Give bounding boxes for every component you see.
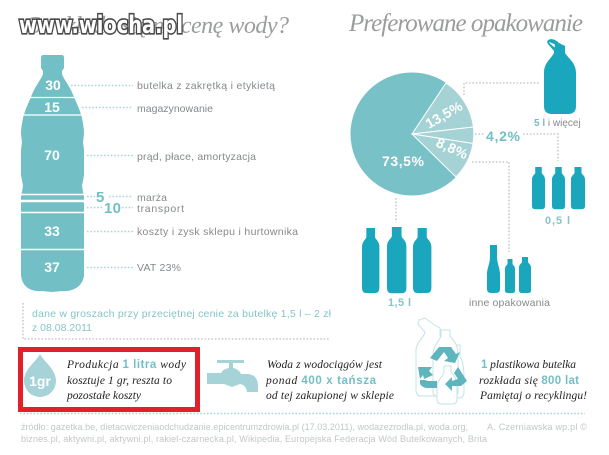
note: data in grosz: dane w groszach przy przeciętnej cenie za butelkę 1,5 l – 2 zł	[32, 308, 332, 320]
icon: 1,5 l bottles	[362, 227, 431, 309]
heading: price of water: Co składa się na cenę wody?	[24, 13, 289, 39]
bottle segment values: 33	[44, 223, 60, 239]
divider	[20, 412, 585, 414]
bottle segment values: 70	[44, 147, 60, 163]
cost labels with leader lines: 5	[96, 189, 104, 206]
cost labels with leader lines: 10	[104, 200, 121, 217]
bottle segment values: 30	[45, 77, 61, 93]
icon: water drop	[24, 354, 56, 397]
connectors from the pie to bottles	[396, 83, 558, 252]
callout: 1 litre production (red frame)	[20, 350, 198, 410]
heading: preferred packaging: Preferowane opakowanie	[348, 10, 583, 37]
recycling fact	[479, 359, 587, 402]
watermark: www.wiocha.pl	[19, 11, 183, 39]
tap water fact: ponad 400 x tańsza	[265, 375, 377, 387]
sources and credit	[21, 422, 587, 444]
note: data in grosz	[23, 303, 332, 339]
icon: water tap	[207, 360, 258, 392]
bottle segment values: 15	[44, 99, 60, 115]
connectors from the pie to bottles: 4,2%	[486, 128, 521, 144]
sources and credit: źródło: gazetka.be, dietacwiczeniaodchudzanie.epicentrumzdrowia.pl (17.03.2011), wodazezrodla.pl, woda.org,	[21, 422, 468, 432]
label: other packaging: inne opakowania	[469, 297, 550, 309]
label: 0,5 l: 0,5 l	[545, 215, 570, 227]
tap water fact	[265, 359, 394, 402]
tap water fact: Woda z wodociągów jest	[267, 359, 383, 371]
sources and credit: A. Czerniawska wp.pl ©	[487, 422, 587, 432]
pie labels: 73,5%	[382, 153, 425, 169]
sources and credit: biznes.pl, aktywni.pl, aktywni.pl, rakiel-czarnecka.pl, Wikipedia, Europejska Federacja Wód Butelkowanych, Brita	[21, 434, 487, 444]
label: 1,5 l: 1,5 l	[388, 297, 411, 309]
cost labels with leader lines: butelka z zakrętką i etykietą	[137, 80, 275, 92]
note: data in grosz: z 08.08.2011	[32, 322, 92, 334]
recycling fact: Pamiętaj o recyklingu!	[479, 390, 587, 402]
cost labels with leader lines: marża	[137, 192, 167, 204]
cost labels with leader lines	[71, 80, 298, 274]
cost labels with leader lines: VAT 23%	[137, 262, 181, 274]
icon: recycled bottles	[416, 318, 467, 404]
bottle segment values	[44, 77, 61, 275]
label: 5 l and more: 5 l i więcej	[534, 118, 581, 129]
pie labels	[382, 97, 471, 169]
cost labels with leader lines: transport	[137, 203, 184, 215]
callout text: kosztuje 1 gr, reszta to	[67, 375, 172, 387]
recycling fact: rozkłada się 800 lat	[479, 375, 579, 387]
icon: water drop: 1gr	[29, 373, 51, 389]
pie labels: 8,8%	[434, 134, 471, 162]
recycling fact: 1 plastikowa butelka	[481, 359, 576, 371]
tap water fact: od tej zakupionej w sklepie	[266, 390, 394, 402]
pie chart	[350, 72, 474, 196]
callout text	[66, 359, 187, 402]
callout text: pozostałe koszty	[66, 390, 142, 402]
cost labels with leader lines: prąd, płace, amortyzacja	[137, 151, 256, 163]
callout text: Produkcja 1 litra wody	[66, 359, 187, 371]
pie labels: 13,5%	[422, 97, 466, 132]
cost labels with leader lines: magazynowanie	[137, 103, 213, 115]
bottle segment values: 37	[44, 259, 60, 275]
icon: 5 l bottle	[534, 39, 581, 129]
icon: other packaging bottles	[469, 245, 550, 309]
big segmented bottle	[18, 55, 86, 292]
icon: 0,5 l bottles	[532, 167, 585, 227]
cost labels with leader lines: koszty i zysk sklepu i hurtownika	[137, 226, 298, 238]
